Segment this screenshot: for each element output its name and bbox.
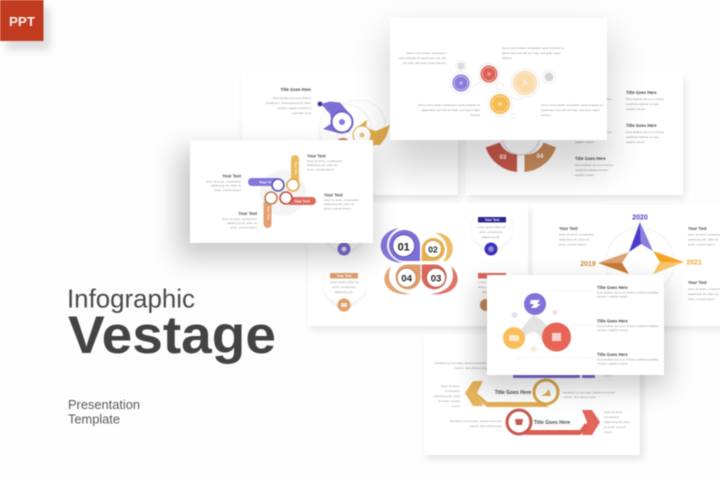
card: bottom left: amet, consectetur bbox=[332, 285, 356, 289]
subtitle: Presentation Template: Presentation bbox=[68, 397, 140, 412]
text: top right: adipiscing elit, dolor sit bbox=[307, 163, 337, 167]
text: upper left note: Nemo enim ipsam voluptatem bbox=[406, 51, 446, 55]
text: slide heading: semper, sagittis mauris ut bbox=[277, 106, 311, 110]
icon: purple gear bbox=[318, 102, 353, 134]
text: yellow left note: sit amet, ccurset bbox=[438, 399, 460, 403]
text: upper centre note bbox=[502, 46, 564, 60]
slide: four petals bbox=[308, 203, 530, 330]
icon: yellow gear bbox=[353, 120, 390, 145]
text: upper centre note: aspernatur aut odit aut fugit, sed quia magni bbox=[502, 51, 561, 55]
text: first gauge item: Duis facilisis dui ut ex finibus bbox=[626, 97, 665, 101]
text: bottom: amet, ccurset ipsum bbox=[230, 226, 257, 230]
star point: right bbox=[653, 251, 684, 274]
text: third item: Duis facilisis dui ut ex finibus vestibulumdiafsa bbox=[597, 358, 659, 362]
dot: pink bbox=[552, 310, 558, 315]
text: slide heading: Title Goes Here bbox=[280, 87, 312, 92]
text: red right note: consectetur bbox=[604, 415, 620, 419]
slide: arrow process bbox=[424, 334, 643, 459]
text: red right note: adipiscing elit, dolor bbox=[604, 420, 630, 424]
text: second gauge item: sagittis mauris bbox=[626, 140, 646, 144]
bubble: grey right bbox=[544, 72, 554, 82]
text: top right: amet, ccurset ipsum bbox=[307, 168, 334, 172]
text: top right: dolor sit amet, consectetur bbox=[307, 159, 342, 163]
text: first gauge item bbox=[606, 90, 665, 111]
text: second gauge item: sagittis mauris bbox=[575, 140, 595, 144]
text: red left note: Hendrerit ut orci eget, lacinia commodo bbox=[450, 419, 502, 423]
text: bottom right: Your Text bbox=[688, 280, 707, 285]
text: second item: Title Goes Here bbox=[597, 318, 628, 324]
bubble: grey small bbox=[458, 62, 464, 70]
subtitle: Presentation Template: Template bbox=[68, 412, 120, 426]
text: first gauge item: Text bbox=[606, 97, 612, 101]
text: top left: dolor sit amet, consectetur bbox=[559, 232, 594, 236]
text: lower left note bbox=[418, 103, 480, 117]
text: left: Your Text bbox=[222, 174, 242, 178]
card: top right: Lorem ipsum dolor sit bbox=[477, 225, 506, 229]
card: top right: amet, consectetur bbox=[479, 230, 503, 234]
text: second gauge item: Text bbox=[606, 130, 612, 134]
label: red arrow title: Title Goes Here bbox=[534, 420, 571, 426]
arrow: red bbox=[507, 410, 600, 435]
card: bottom right: Lorem ipsum bbox=[478, 280, 496, 284]
text: bottom: adipiscing elit, dolor sit bbox=[227, 221, 257, 225]
card: bottom left: Your Text bbox=[337, 274, 352, 278]
gauge segment 04 bbox=[524, 142, 556, 172]
dot: peach bbox=[530, 346, 536, 352]
text: left: adipiscing elit, dolor sit bbox=[211, 184, 241, 188]
text: bottom: dolor sit amet, consectetur bbox=[222, 217, 257, 221]
text: right: dolor sit amet, consectetur bbox=[324, 198, 359, 202]
card: bottom left bbox=[324, 272, 365, 312]
arrow: yellow bbox=[465, 380, 558, 407]
text: first item: Duis facilisis dui ut ex finibus vestibulumdiafsa bbox=[597, 290, 659, 294]
pill: purple: Your Text bbox=[259, 180, 275, 184]
text: left bbox=[206, 174, 242, 192]
circle: red bbox=[542, 322, 571, 352]
text: second gauge item: Title Goes Here bbox=[626, 123, 657, 128]
text: left: amet, ccurset ipsum bbox=[214, 188, 241, 192]
gauge labels bbox=[500, 154, 544, 161]
card: bottom right: amet, cons bbox=[478, 285, 493, 289]
card: bottom right: adip bbox=[482, 290, 488, 294]
text: red right note: dolor sit amet, bbox=[604, 410, 623, 414]
gauge labels: 04 bbox=[537, 154, 544, 160]
label: yellow arrow title: Title Goes Here bbox=[495, 390, 532, 396]
text: slide heading: imperdiet urna bbox=[292, 111, 311, 115]
text: third item: semper, sagittis mauris bbox=[597, 362, 628, 366]
card: top right: adipiscing elit. bbox=[482, 235, 501, 239]
card: top left bbox=[324, 222, 365, 256]
year label 2021: 2021 bbox=[686, 260, 702, 266]
text: third gauge item: Duis facilisis dui ut ex finibus bbox=[575, 163, 614, 167]
text: upper note bbox=[435, 361, 487, 370]
text: lower right note: Nemo enim ipsam voluptatem quia voluptas sit bbox=[541, 103, 603, 107]
pill: purple bbox=[248, 178, 284, 191]
text: upper left note: quia voluptas sit aspernatur aut odit bbox=[399, 56, 446, 60]
text: top right bbox=[307, 154, 342, 172]
text: top right: amet, ccurset ipsum bbox=[688, 242, 715, 246]
text: right: Your Text bbox=[324, 192, 343, 198]
circle: yellow bbox=[503, 327, 525, 349]
petal 03 bbox=[422, 264, 458, 294]
gauge segment 03 bbox=[486, 142, 517, 172]
text: yellow right note bbox=[563, 390, 616, 399]
slide: radial gauge bbox=[466, 71, 685, 199]
star point: top bbox=[629, 222, 653, 252]
text: lower left note: Nemo enim ipsam voluptatem quia voluptas sit bbox=[418, 103, 480, 107]
pill: orange bbox=[264, 192, 277, 228]
text: bottom bbox=[222, 211, 258, 230]
text: first item: semper, sagittis mauris bbox=[597, 294, 628, 298]
card: bottom right bbox=[472, 272, 512, 311]
pill: yellow bbox=[287, 155, 299, 191]
text: bottom right: adipiscing elit, dolor sit bbox=[688, 292, 718, 296]
text: upper left note bbox=[399, 51, 446, 65]
text: slide heading: vestibulum. Pellentesque by tellus bbox=[266, 101, 311, 105]
text: right: amet, ccurset ipsum bbox=[324, 206, 351, 210]
text: top right: adipiscing elit, dolor sit bbox=[688, 238, 718, 242]
bubble: purple bbox=[452, 74, 470, 92]
badge: PPT: PPT bbox=[9, 15, 35, 29]
text: third item: Title Goes Here bbox=[597, 352, 628, 357]
petal 04: 04 bbox=[401, 274, 413, 284]
dot: purple bbox=[512, 312, 518, 318]
text: second gauge item: Duis facilisis dui ut ex finibus bbox=[626, 130, 665, 134]
hub blob bbox=[522, 315, 552, 340]
bubble: yellow bbox=[490, 94, 510, 114]
text: first item: Title Goes Here bbox=[597, 285, 628, 290]
gauge labels: 03 bbox=[500, 155, 507, 161]
card: bottom left: Lorem ipsum dolor sit bbox=[330, 280, 358, 284]
petal 01 bbox=[381, 228, 420, 263]
text: top left: amet, ccurset ipsum bbox=[559, 242, 586, 246]
text: top right: Your Text bbox=[688, 226, 707, 231]
title: Infographic Vestage bbox=[67, 284, 276, 365]
slide: bubble diagram bbox=[388, 18, 610, 170]
slide: three circle hub bbox=[478, 275, 668, 388]
bubble: peach bbox=[513, 71, 537, 95]
text: yellow left note: adipiscing elit, dolor bbox=[434, 394, 460, 398]
text: top right: Your Text bbox=[307, 154, 326, 158]
arrow: purple band bbox=[513, 370, 613, 378]
text: bottom right: amet, ccurset ipsum bbox=[688, 297, 715, 301]
text: slide heading bbox=[266, 87, 312, 115]
text: bottom: Your Text bbox=[238, 211, 258, 216]
petal 02 bbox=[422, 233, 453, 262]
text: upper centre note: dolores bbox=[502, 56, 512, 60]
text: lower right note: dolores bbox=[541, 113, 551, 117]
text: second item: Duis facilisis dui ut ex finibus vestibulumdiafsa bbox=[597, 324, 659, 328]
pill: orange: Your Text bbox=[266, 206, 270, 220]
text: third gauge item: Title Goes Here bbox=[575, 156, 606, 161]
slide: cross diagram bbox=[178, 140, 373, 258]
text: top left: Your Text bbox=[559, 226, 578, 231]
text: red left note: mauris. Sed ultrices quis bbox=[469, 424, 502, 428]
text: lower left note: aspernatur aut odit aut fugit, sed quia magni bbox=[421, 108, 480, 112]
year label 2020: 2020 bbox=[632, 214, 648, 222]
text: upper left note: aut fugit, sed quia magni dolores bbox=[403, 61, 446, 65]
text: right bbox=[324, 192, 359, 210]
text: top left bbox=[559, 226, 594, 246]
card: top right: Your Text bbox=[485, 218, 500, 222]
text: yellow right note: mauris. Sed ultrices quis bbox=[563, 395, 596, 399]
petal 02: 02 bbox=[428, 244, 438, 254]
title: Infographic Vestage: Infographic bbox=[67, 284, 195, 314]
arrow: purple band: ipsum bbox=[604, 373, 613, 377]
text: second item: semper, sagittis mauris bbox=[597, 328, 628, 332]
text: first gauge item: Title Goes Here bbox=[626, 90, 657, 95]
text: third item bbox=[597, 352, 659, 366]
text: red right note: ipsum bbox=[604, 430, 613, 434]
text: yellow left note: consectetur bbox=[444, 389, 460, 393]
icon: red gear bbox=[335, 138, 351, 154]
badge: PPT bbox=[0, 0, 50, 50]
text: top right bbox=[688, 226, 720, 246]
petal 04 bbox=[384, 264, 420, 294]
card: top right bbox=[472, 215, 512, 256]
pill: red bbox=[280, 192, 316, 205]
petal 01: 01 bbox=[398, 242, 410, 254]
text: right: adipiscing elit, dolor sit bbox=[324, 202, 354, 206]
text: red right note: sit amet, ccurset bbox=[604, 425, 626, 429]
text: first gauge item: sagittis mauris bbox=[626, 107, 646, 111]
pill: yellow: Your Text bbox=[294, 161, 298, 175]
circle: purple bbox=[524, 293, 546, 315]
text: second gauge item: vestibulumdiafsa semper, bbox=[626, 135, 660, 139]
text: lower right note bbox=[541, 103, 603, 117]
text: top left: adipiscing elit, dolor sit bbox=[559, 238, 589, 242]
text: yellow left note: ipsum bbox=[452, 404, 460, 408]
text: upper note: mauris. Sed ultrices quis bbox=[454, 366, 487, 370]
text: lower left note: dolores bbox=[470, 113, 480, 117]
text: yellow left note bbox=[434, 384, 460, 408]
text: slide heading: Duis facilisis dui ut ex finibus bbox=[273, 96, 311, 100]
text: lower right note: aspernatur aut odit aut fugit, sed quia magni bbox=[541, 108, 600, 112]
text: second gauge item bbox=[575, 123, 665, 144]
text: upper centre note: Nemo enim ipsam voluptatem quia voluptas sit bbox=[502, 46, 564, 50]
text: first item bbox=[597, 285, 659, 298]
subtitle: Presentation Template bbox=[68, 397, 140, 426]
slide: timeline star bbox=[533, 205, 720, 330]
text: first gauge item: vestibulumdiafsa semper, bbox=[626, 102, 660, 106]
petal 03: 03 bbox=[431, 274, 441, 284]
connector lines bbox=[517, 291, 593, 358]
slide: purple and yellow gears bbox=[242, 72, 460, 199]
text: left: dolor sit amet, consectetur bbox=[206, 180, 241, 184]
text: yellow left note: dolor sit amet, bbox=[441, 384, 460, 388]
pill: red: Your Text bbox=[294, 200, 310, 204]
card: bottom left: adipiscing elit. bbox=[335, 290, 354, 294]
text: second item bbox=[597, 318, 659, 332]
text: third gauge item: vestibulumdiafsa semper, bbox=[575, 168, 609, 172]
year label 2019: 2019 bbox=[580, 261, 596, 268]
text: third gauge item bbox=[575, 156, 614, 177]
connector halos bbox=[450, 61, 556, 118]
title: Infographic Vestage: Vestage bbox=[68, 306, 276, 365]
star point: left bbox=[598, 252, 629, 274]
text: third gauge item: sagittis mauris bbox=[575, 173, 595, 177]
text: red left note bbox=[450, 419, 502, 428]
text: bottom right bbox=[688, 280, 720, 301]
text: yellow right note: Hendrerit ut orci eget, lacinia commodo bbox=[563, 390, 616, 394]
bubble: red bbox=[480, 66, 498, 82]
text: upper note: Hendrerit ut orci eget, lacinia commodo bbox=[435, 361, 487, 365]
text: red right note bbox=[604, 410, 630, 434]
